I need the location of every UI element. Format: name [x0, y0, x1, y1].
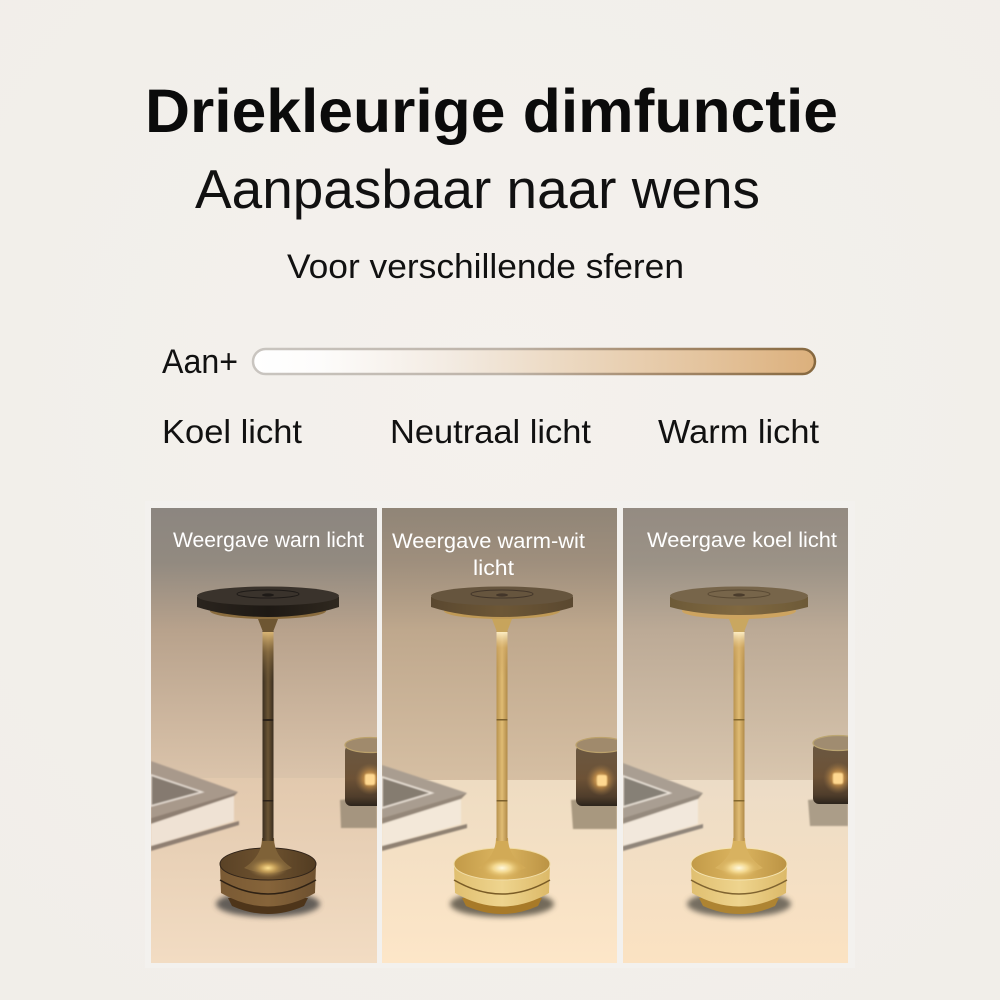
lamp: [431, 586, 573, 917]
head: [210, 610, 326, 619]
dimmer slider: [162, 343, 815, 381]
slider bar: [253, 349, 815, 374]
table: [151, 778, 377, 963]
book: [151, 761, 239, 851]
book: [623, 763, 703, 851]
base top: [220, 848, 316, 880]
stem: [496, 625, 508, 841]
candle: [570, 736, 617, 830]
wall: [623, 508, 848, 782]
stem: [734, 625, 744, 841]
title: Driekleurige dimfunctie: [145, 77, 838, 145]
base foot: [699, 898, 779, 914]
label: warm light: Warm licht: [658, 413, 819, 450]
panel caption: Weergave warn licht: [173, 529, 364, 552]
base shadow: [216, 891, 320, 917]
label: neutral light: Neutraal licht: [390, 413, 591, 450]
base shadow: [687, 891, 791, 917]
stem: [262, 625, 274, 841]
panel: cool light display: [623, 508, 863, 963]
head: [682, 610, 796, 619]
base foot: [228, 898, 308, 914]
photo frame backdrop: [145, 501, 855, 968]
panel caption: licht: [473, 557, 514, 580]
candle: [808, 734, 848, 827]
base top: [454, 848, 550, 880]
book: [382, 765, 467, 851]
wall: [151, 508, 377, 780]
base body: [454, 865, 550, 906]
scale labels: [162, 413, 819, 450]
table: [623, 780, 848, 963]
slider label: Aan+: [162, 343, 238, 381]
candle: [340, 736, 377, 829]
subtitle: Aanpasbaar naar wens: [195, 158, 760, 220]
table: [382, 780, 617, 963]
base top: [691, 848, 787, 880]
base body: [220, 865, 316, 906]
panel caption: Weergave warm-wit: [392, 530, 585, 553]
label: cool light: Koel licht: [162, 413, 302, 450]
lamp: [197, 586, 339, 917]
head: [444, 610, 560, 619]
base shadow: [450, 891, 554, 917]
panel: warm light display: [151, 508, 395, 963]
panel: warm-white light display: [382, 508, 626, 963]
base foot: [462, 898, 542, 914]
panel caption: [392, 532, 585, 575]
base body: [691, 865, 787, 906]
panel caption: Weergave koel licht: [647, 529, 837, 552]
lamp: [670, 586, 808, 917]
tagline: Voor verschillende sferen: [287, 248, 684, 286]
wall: [382, 508, 617, 782]
